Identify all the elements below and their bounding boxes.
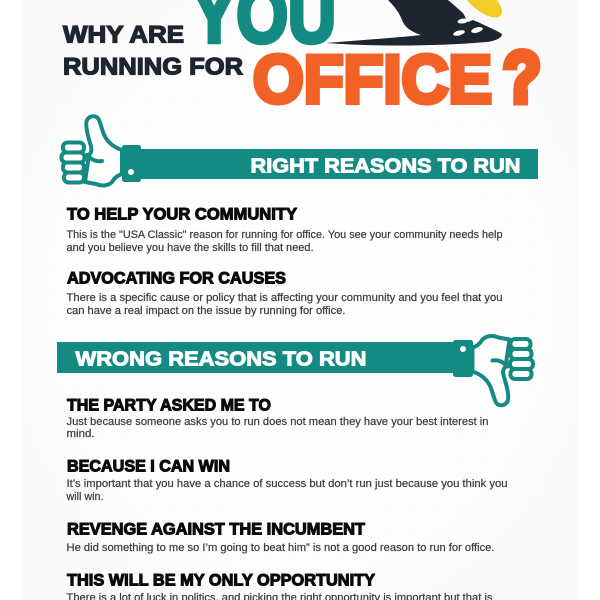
item: this will be my only opportunity	[66, 570, 492, 600]
item: revenge against the incumbent: He did something to me so I’m going to beat him” is not a good reason to run for office.	[66, 542, 494, 554]
banner label: WRONG REASONS TO RUN	[76, 348, 367, 370]
item: revenge against the incumbent: REVENGE AGAINST THE INCUMBENT	[67, 520, 366, 538]
item: advocating for causes: There is a specific cause or policy that is affecting your community and you feel that you	[66, 292, 503, 304]
banner: wrong reasons to run	[57, 336, 533, 405]
title: RUNNING FOR	[63, 54, 243, 80]
item: because i can win: It’s important that you have a chance of success but don’t run just because you think you	[66, 478, 508, 490]
banner label: RIGHT REASONS TO RUN	[250, 154, 520, 178]
item: to help your community: This is the "USA Classic" reason for running for office. You see your community needs help	[66, 229, 503, 241]
icon: yellow shape	[467, 0, 502, 18]
item: to help your community: and you believe you have the skills to fill that need.	[66, 242, 314, 254]
item: advocating for causes: ADVOCATING FOR CAUSES	[67, 268, 286, 288]
title: ?	[503, 38, 541, 118]
item: because i can win: BECAUSE I CAN WIN	[67, 456, 230, 476]
title: OFFICE	[253, 42, 492, 118]
icon: thumbs up	[62, 116, 122, 185]
item: revenge against the incumbent	[66, 520, 494, 554]
item: the party asked me to: THE PARTY ASKED ME TO	[67, 396, 271, 414]
illustration: running figure silhouette	[326, 0, 502, 46]
item: the party asked me to: mind.	[66, 428, 94, 440]
item: advocating for causes	[66, 268, 503, 317]
item: because i can win	[65, 456, 508, 503]
item: the party asked me to: Just because someone asks you to run does not mean they have your best interest in	[66, 416, 489, 428]
item: because i can win: will win.	[65, 491, 104, 503]
item: to help your community	[66, 204, 503, 254]
icon: thumbs down	[472, 336, 533, 405]
title	[63, 0, 541, 118]
item: this will be my only opportunity: THIS WILL BE MY ONLY OPPORTUNITY	[67, 570, 376, 590]
title: WHY ARE	[63, 22, 184, 48]
item: to help your community: TO HELP YOUR COMMUNITY	[67, 204, 298, 224]
item: advocating for causes: can have a real impact on the issue by running for office.	[66, 305, 346, 317]
item: the party asked me to	[66, 396, 489, 440]
banner: right reasons to run	[62, 116, 538, 185]
